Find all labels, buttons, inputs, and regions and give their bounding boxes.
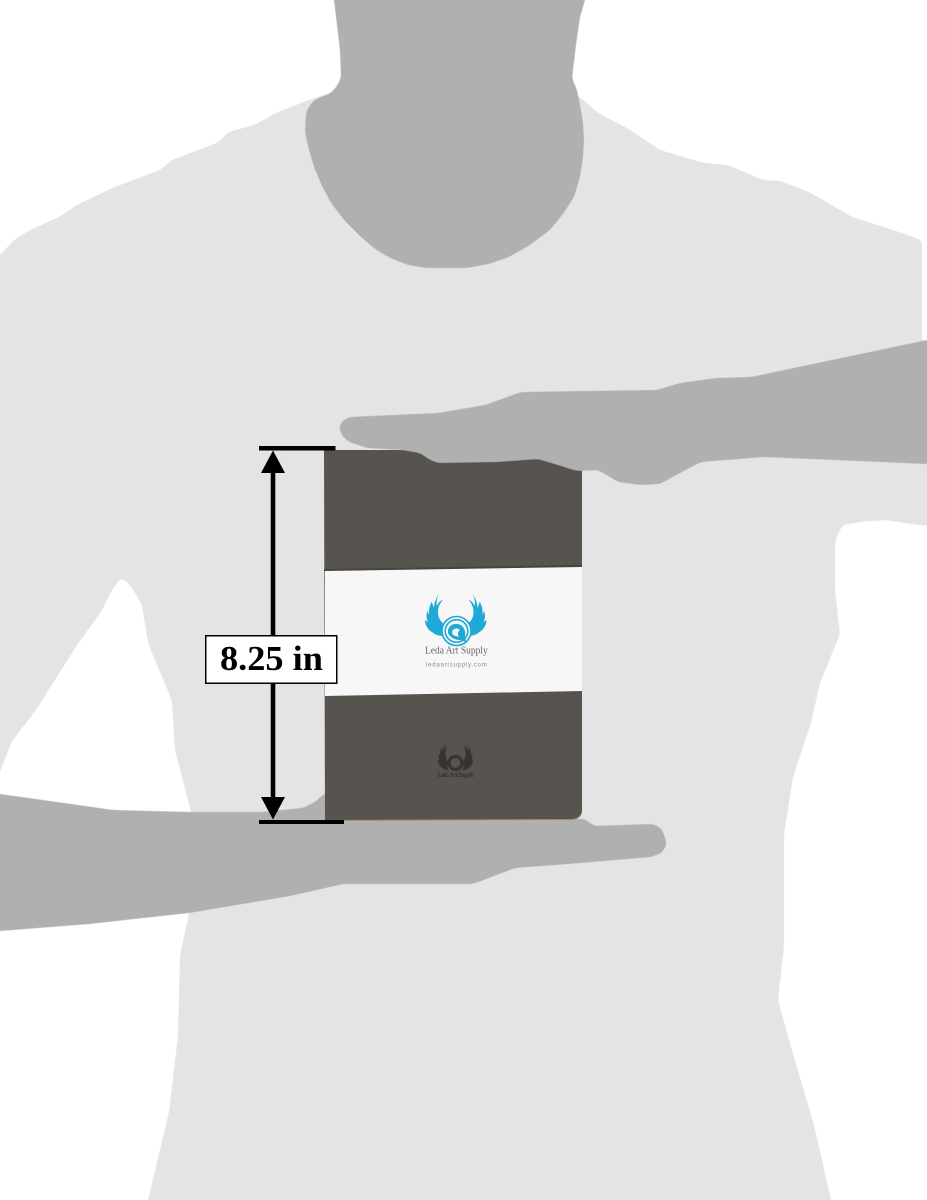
lower hand — [0, 791, 667, 933]
upper hand — [339, 336, 927, 485]
notebook — [324, 450, 582, 820]
band shadow — [324, 565, 582, 571]
cyan logo on band — [425, 593, 486, 646]
right wing — [468, 593, 486, 636]
embossed logo on cover — [438, 741, 474, 779]
label text: 8.25 in — [220, 639, 323, 678]
brand name: Leda Art Supply — [425, 645, 488, 656]
notebook page edge — [326, 812, 582, 820]
embossed right wing — [462, 741, 473, 770]
bottom arrowhead — [261, 797, 285, 820]
bottom extension line — [259, 820, 344, 824]
top arrowhead — [261, 450, 285, 473]
dimension label — [206, 636, 337, 683]
notebook cover — [324, 450, 582, 820]
website: ledaartsupply.com — [426, 663, 487, 669]
embossed ring — [449, 756, 462, 770]
top extension line — [259, 446, 336, 450]
paper band — [325, 567, 582, 696]
label box — [206, 636, 337, 683]
logo swan — [448, 624, 466, 642]
left wing — [425, 593, 444, 636]
dimension: height arrow — [259, 446, 344, 824]
head and neck silhouette — [305, 0, 590, 268]
logo rings — [442, 616, 472, 646]
embossed left wing — [438, 741, 449, 770]
vertical shaft — [271, 470, 275, 800]
embossed brand name: Leda Art Supply — [438, 771, 474, 779]
